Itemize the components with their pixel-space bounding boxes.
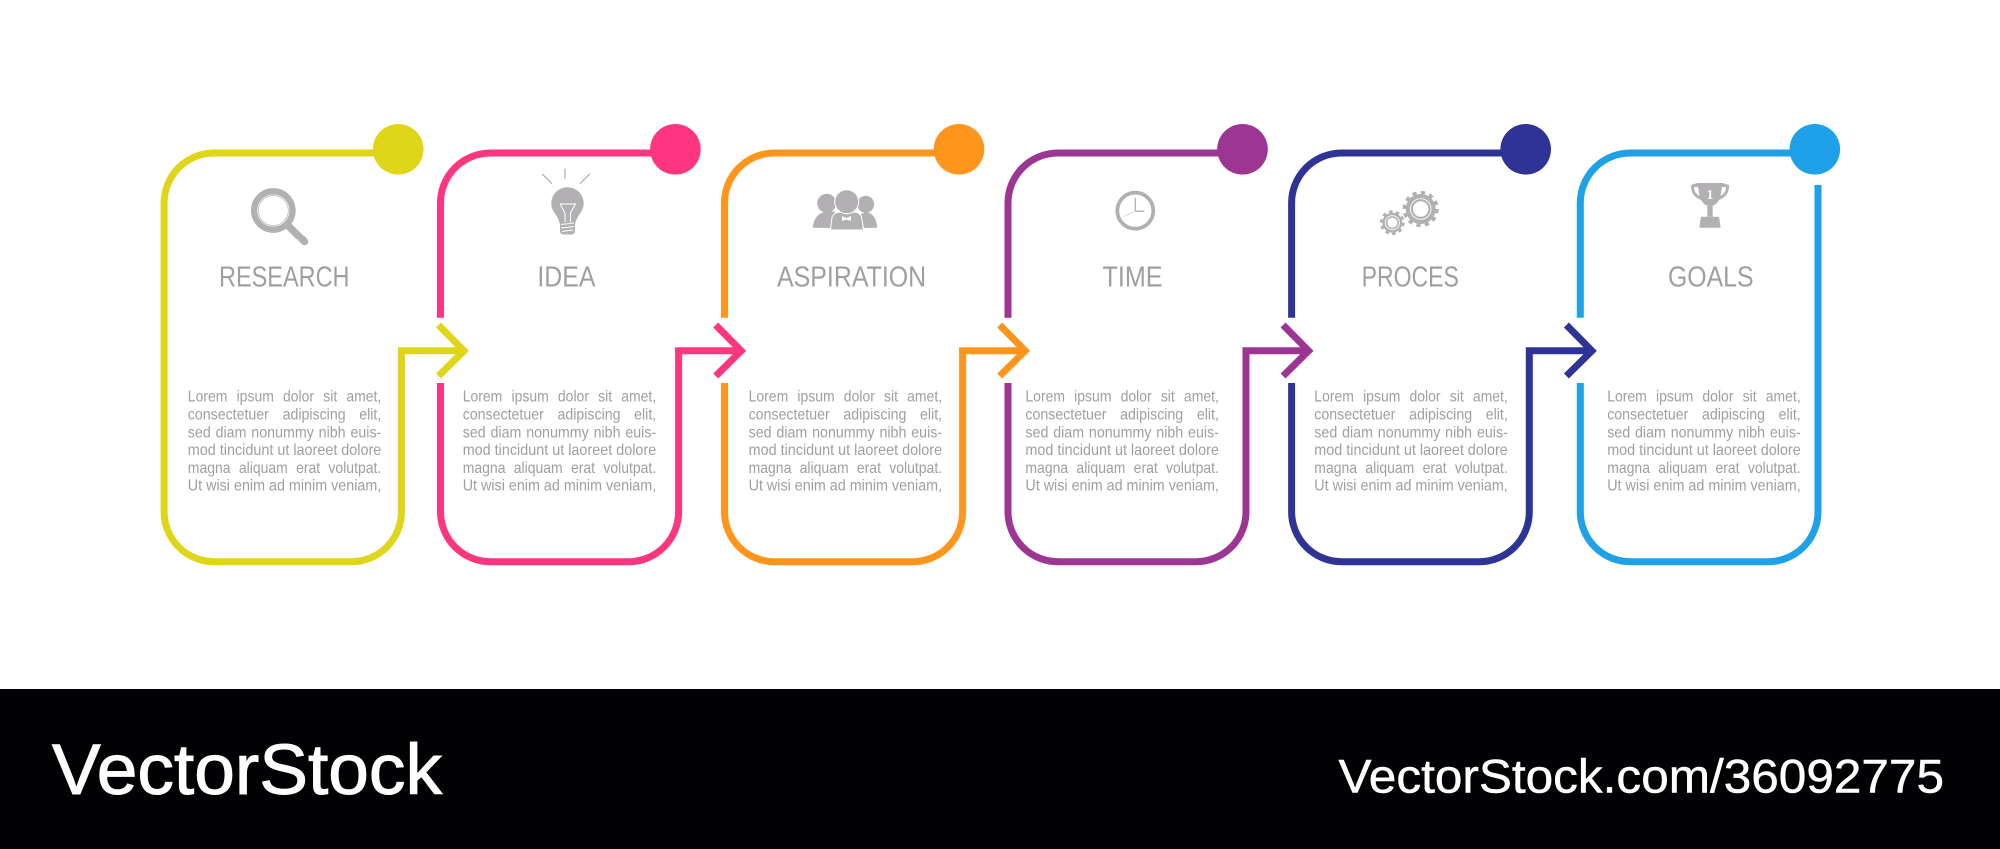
icon: trophy: 1 [1706, 188, 1714, 203]
node dot: time [1217, 124, 1268, 175]
panel: research [164, 124, 464, 562]
card outline and arrow: aspiration [724, 153, 1025, 562]
panel: goals [1580, 124, 1840, 562]
text block: time: sed diam nonummy nibh euis- [1025, 424, 1219, 441]
text block: aspiration: consectetuer adipiscing elit, [749, 406, 942, 424]
card outline and arrow: idea [440, 153, 741, 562]
icon: gears [1381, 193, 1437, 234]
text block: goals [1607, 389, 1801, 495]
panel: idea [440, 124, 741, 562]
text block: idea: Lorem ipsum dolor sit amet, [463, 389, 656, 406]
text block: goals: Ut wisi enim ad minim veniam, [1607, 478, 1801, 495]
text block: time [1025, 389, 1219, 495]
icon: clock [1117, 193, 1153, 229]
text block: goals: magna aliquam erat volutpat. [1607, 460, 1801, 477]
icon: trophy [1691, 183, 1729, 228]
text block: aspiration: sed diam nonummy nibh euis- [749, 424, 942, 441]
text block: idea: Ut wisi enim ad minim veniam, [463, 478, 656, 495]
node dot: aspiration [934, 124, 984, 175]
text block: time: magna aliquam erat volutpat. [1025, 460, 1219, 477]
text block: research [188, 389, 381, 495]
text block: proces: mod tincidunt ut laoreet dolore [1314, 442, 1508, 459]
text block: aspiration [749, 389, 942, 495]
text block: idea: magna aliquam erat volutpat. [463, 460, 656, 477]
heading: research: RESEARCH [219, 262, 350, 294]
heading: goals: GOALS [1668, 262, 1754, 294]
heading: time: TIME [1102, 262, 1162, 294]
text block: goals: sed diam nonummy nibh euis- [1607, 424, 1801, 441]
node dot: goals [1790, 124, 1840, 175]
text block: research: Ut wisi enim ad minim veniam, [188, 478, 381, 495]
text block: goals: Lorem ipsum dolor sit amet, [1607, 389, 1801, 406]
heading: proces: PROCES [1362, 262, 1459, 294]
text block: goals: consectetuer adipiscing elit, [1607, 406, 1801, 424]
text block: proces: magna aliquam erat volutpat. [1314, 460, 1508, 477]
card outline and arrow: research [164, 153, 464, 562]
text block: proces [1314, 389, 1508, 495]
text block: goals: mod tincidunt ut laoreet dolore [1607, 442, 1801, 459]
text block: proces: consectetuer adipiscing elit, [1314, 406, 1508, 424]
card outline and arrow: time [1008, 153, 1309, 562]
card outline and arrow: proces [1292, 153, 1592, 562]
text block: aspiration: Ut wisi enim ad minim veniam, [749, 478, 942, 495]
logo text: VectorStock [52, 731, 443, 810]
text block: aspiration: Lorem ipsum dolor sit amet, [749, 389, 942, 406]
text block: research: Lorem ipsum dolor sit amet, [188, 389, 381, 406]
image id url: VectorStock.com/36092775 [1338, 750, 1944, 802]
text block: idea: sed diam nonummy nibh euis- [463, 424, 656, 441]
card outline: goals [1580, 153, 1818, 562]
panel: time [1008, 124, 1309, 562]
node dot: idea [650, 124, 701, 175]
text block: proces: Lorem ipsum dolor sit amet, [1314, 389, 1508, 406]
text block: research: sed diam nonummy nibh euis- [188, 424, 381, 441]
icon: light bulb [542, 169, 590, 234]
node dot: proces [1500, 124, 1551, 175]
text block: proces: Ut wisi enim ad minim veniam, [1314, 478, 1508, 495]
heading: idea: IDEA [537, 262, 596, 294]
icon: people [813, 190, 877, 230]
text block: research: consectetuer adipiscing elit, [188, 406, 381, 424]
text block: idea: mod tincidunt ut laoreet dolore [463, 442, 656, 459]
heading: aspiration: ASPIRATION [777, 262, 926, 294]
text block: research: magna aliquam erat volutpat. [188, 460, 381, 477]
text block: aspiration: magna aliquam erat volutpat. [749, 460, 942, 477]
text block: time: Ut wisi enim ad minim veniam, [1025, 478, 1219, 495]
text block: time: consectetuer adipiscing elit, [1025, 406, 1219, 424]
text block: time: mod tincidunt ut laoreet dolore [1025, 442, 1219, 459]
panel: proces [1292, 124, 1592, 562]
text block: idea [463, 389, 656, 495]
text block: time: Lorem ipsum dolor sit amet, [1025, 389, 1219, 406]
footer banner [0, 689, 2000, 849]
icon: magnifier [254, 191, 304, 242]
text block: aspiration: mod tincidunt ut laoreet dolore [749, 442, 942, 459]
panel: aspiration [724, 124, 1025, 562]
text block: idea: consectetuer adipiscing elit, [463, 406, 656, 424]
text block: proces: sed diam nonummy nibh euis- [1314, 424, 1508, 441]
text block: research: mod tincidunt ut laoreet dolore [188, 442, 381, 459]
node dot: research [373, 124, 424, 175]
